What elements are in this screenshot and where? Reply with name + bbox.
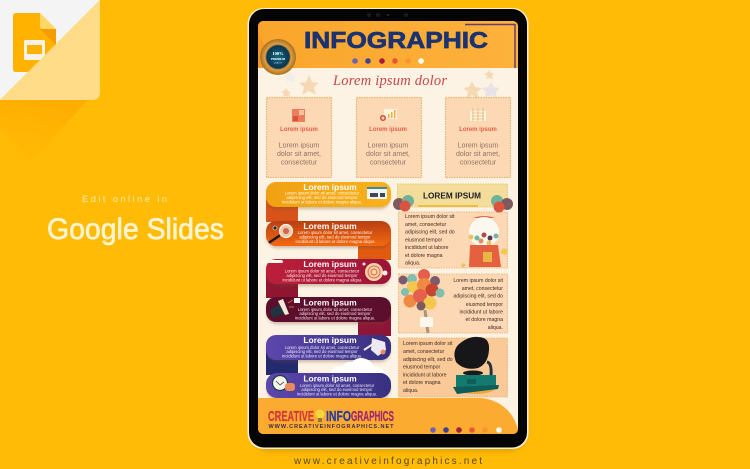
panel text: incididunt ut labore bbox=[405, 245, 449, 251]
ribbon 3: Lorem ipsum dolor sit amet, consectetur bbox=[285, 268, 360, 274]
cloud bbox=[330, 358, 386, 373]
panel text: eiusmod tempor bbox=[466, 302, 503, 308]
panel text: et dolore magna bbox=[466, 317, 503, 323]
panel text: eiusmod tempor bbox=[403, 364, 440, 370]
card text: consectetur bbox=[460, 160, 497, 166]
ribbon 4 bbox=[266, 297, 391, 322]
panel text: aliqua. bbox=[488, 325, 503, 331]
logo text: Google Slides: Google Slides bbox=[47, 213, 224, 246]
icon: gramophone bbox=[453, 337, 499, 394]
tablet frame bbox=[248, 8, 528, 451]
ribbon 1 bbox=[266, 182, 391, 207]
icon: calendar bbox=[470, 108, 486, 121]
ribbon connectors bbox=[266, 195, 391, 375]
title: INFOGRAPHIC bbox=[304, 27, 488, 53]
panel: lorem ipsum heading bbox=[398, 184, 508, 207]
panel: card 1 bbox=[266, 98, 332, 178]
panel text: et dolore magna bbox=[405, 253, 443, 259]
ribbon shadows bbox=[267, 184, 390, 400]
panel: lorem ipsum heading: LOREM IPSUM bbox=[423, 192, 481, 200]
ribbon 4: adipiscing elit, sed do eiusmod tempor bbox=[299, 311, 371, 316]
icon: puzzle bbox=[292, 109, 305, 122]
ribbon 2: Lorem ipsum dolor sit amet, consectetur bbox=[298, 230, 373, 235]
ribbon 2 bbox=[266, 221, 391, 246]
ribbon 6: incididunt ut labore et dolore magna aliqua. bbox=[297, 392, 377, 396]
ribbon 6: Lorem ipsum dolor sit amet, consectetur bbox=[300, 383, 375, 388]
panel: gramophone bbox=[398, 337, 508, 397]
card text: dolor sit amet, bbox=[456, 151, 500, 158]
ribbon 6 bbox=[266, 373, 391, 398]
premium seal badge: QUALITY bbox=[274, 62, 283, 64]
panel text: aliqua. bbox=[405, 260, 420, 266]
logo: creative infographics: WWW.CREATIVEINFOGRAPHICS.NET bbox=[268, 424, 394, 430]
ribbon 3: incididunt ut labore et dolore magna aliqua bbox=[283, 278, 362, 282]
ribbon 4: Lorem ipsum bbox=[303, 298, 357, 308]
ribbon 5: Lorem ipsum dolor sit amet, consectetur bbox=[285, 345, 360, 350]
footer band bbox=[258, 398, 518, 434]
ribbon 5: incididunt ut labore et dolore magna aliqua. bbox=[282, 354, 362, 358]
icon: wrench and shield bbox=[364, 338, 386, 356]
logo: creative infographics: INFO bbox=[326, 408, 351, 425]
icon: megaphone bbox=[270, 298, 300, 318]
card text: Lorem ipsum bbox=[368, 142, 408, 150]
icon: magnifier bbox=[270, 224, 292, 242]
card text: dolor sit amet, bbox=[277, 151, 321, 158]
panel text: eiusmod tempor bbox=[405, 238, 442, 244]
panel: card 2 bbox=[356, 98, 422, 178]
panel text: aliqua. bbox=[403, 388, 418, 394]
panel: card 3 bbox=[446, 98, 510, 178]
panel text: amet, consectetur bbox=[405, 222, 447, 228]
subtitle: Lorem ipsum dolor bbox=[332, 73, 447, 89]
ribbon 5 bbox=[266, 335, 391, 360]
ribbon 3: adipiscing elit, sed do eiusmod tempor bbox=[286, 273, 358, 278]
panel text: adipiscing elit, sed do bbox=[403, 357, 453, 363]
ribbon 6: adipiscing elit, sed do eiusmod tempor bbox=[301, 387, 373, 392]
logo: creative infographics: GRAPHICS bbox=[351, 408, 394, 425]
ribbon 5: Lorem ipsum bbox=[303, 335, 357, 345]
panel text: et dolore magna bbox=[403, 380, 441, 386]
premium seal badge: PREMIUM bbox=[271, 57, 286, 61]
card text: consectetur bbox=[281, 160, 318, 166]
premium seal badge: 100% bbox=[272, 51, 284, 56]
panel text: incididunt ut labore bbox=[403, 372, 447, 378]
caption: edit online in: Edit online in bbox=[82, 194, 167, 205]
logo: creative infographics: CREATIVE bbox=[268, 408, 314, 425]
ribbon 5: adipiscing elit, sed do eiusmod tempor bbox=[286, 349, 358, 354]
logo: creative infographics bbox=[268, 408, 394, 430]
ribbon 3: Lorem ipsum bbox=[303, 259, 357, 269]
ribbon 1: incididunt ut labore et dolore magna aliqua. bbox=[282, 200, 362, 204]
panel text: amet, consectetur bbox=[403, 349, 445, 355]
icon: browser window bbox=[367, 187, 387, 199]
icon: heart balloons right bbox=[491, 195, 513, 212]
panel: balloons bbox=[398, 269, 508, 333]
panel text: Lorem ipsum dolor sit bbox=[403, 341, 453, 347]
icon: gumball machine bbox=[461, 216, 508, 268]
ribbon 6: Lorem ipsum bbox=[303, 374, 357, 384]
website url: www.creativeinfographics.net bbox=[293, 456, 482, 467]
panel: card 3: Lorem ipsum bbox=[459, 127, 497, 133]
footer dots bbox=[430, 427, 502, 433]
ribbon 1: adipiscing elit, sed do eiusmod tempor bbox=[286, 195, 358, 200]
ribbon 2: adipiscing elit, sed do eiusmod tempor bbox=[299, 234, 371, 240]
panel text: adipiscing elit, sed do bbox=[453, 294, 503, 300]
panel text: adipiscing elit, sed do bbox=[405, 230, 455, 236]
ribbon 4: Lorem ipsum dolor sit amet, consectetur bbox=[298, 307, 373, 312]
icon: lightbulb bbox=[316, 410, 324, 422]
screen background bbox=[258, 21, 518, 434]
panel: gumball bbox=[398, 212, 508, 268]
card text: consectetur bbox=[370, 160, 407, 166]
panel text: incididunt ut labore bbox=[459, 310, 503, 316]
card text: dolor sit amet, bbox=[366, 151, 410, 158]
ribbon 1: Lorem ipsum dolor sit amet, consectetur bbox=[285, 190, 360, 196]
icon: slides document bbox=[13, 13, 56, 72]
ribbon 1: Lorem ipsum bbox=[303, 182, 357, 192]
ribbon 4: incididunt ut labore et dolore magna aliqua. bbox=[295, 316, 375, 320]
ribbon 2: incididunt ut labore et dolore magna aliqua bbox=[296, 239, 375, 244]
panel text: amet, consectetur bbox=[462, 286, 503, 292]
icon: balloon bunch bbox=[398, 269, 444, 333]
panel: card 2: Lorem ipsum bbox=[369, 127, 407, 133]
premium seal badge bbox=[260, 39, 296, 75]
card text: Lorem ipsum bbox=[279, 142, 319, 150]
icon: target bbox=[362, 262, 388, 281]
ribbon 3 bbox=[260, 259, 391, 284]
header dots bbox=[352, 58, 424, 64]
icon: clock bbox=[272, 376, 295, 391]
panel text: Lorem ipsum dolor sit bbox=[405, 214, 455, 220]
panel text: Lorem ipsum dolor sit bbox=[453, 278, 504, 284]
ribbon 2: Lorem ipsum bbox=[303, 221, 357, 231]
stars decoration bbox=[281, 70, 500, 99]
header band bbox=[258, 21, 518, 68]
corner fold with Google Slides icon bbox=[0, 0, 100, 160]
icon: chart and gear bbox=[381, 109, 397, 120]
panel: card 1: Lorem ipsum bbox=[280, 127, 318, 133]
card text: Lorem ipsum bbox=[458, 142, 498, 150]
icon: heart balloons left bbox=[393, 195, 414, 212]
